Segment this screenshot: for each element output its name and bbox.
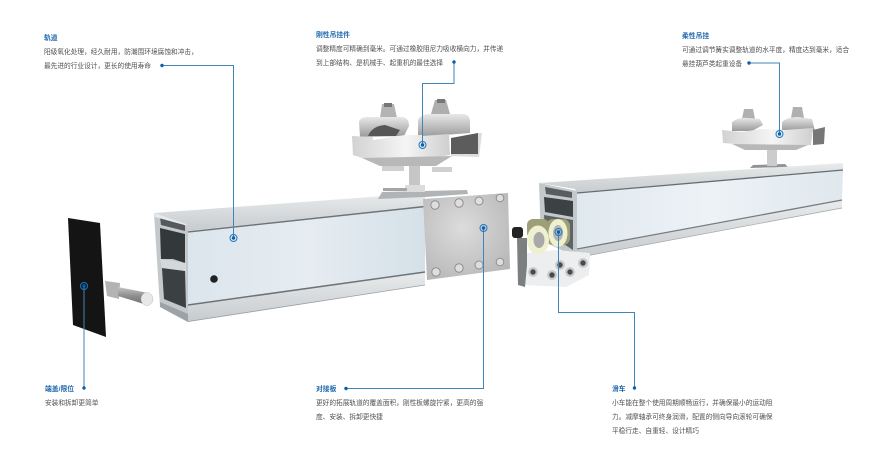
description: 更好的拓展轨道的覆盖面积，刚性板螺旋拧紧，更高的强 — [316, 398, 483, 407]
trolley small bolts — [529, 259, 587, 279]
description: 到上部结构、是机械手、起重机的最佳选择 — [316, 58, 443, 67]
description — [612, 398, 773, 435]
leader line — [555, 228, 636, 390]
limit bolt — [105, 281, 153, 306]
callout: trolley — [555, 228, 773, 435]
end cap — [68, 218, 106, 337]
flexible hanger — [722, 107, 825, 166]
description — [316, 44, 504, 67]
right rail end profile — [539, 183, 577, 258]
joint plate — [423, 193, 510, 280]
flexible plate — [722, 128, 813, 146]
right rail top strip — [539, 163, 843, 193]
rail bottom strip — [188, 272, 425, 322]
heading: 对接板 — [316, 384, 337, 393]
leader line — [344, 224, 487, 390]
side arm — [517, 238, 527, 287]
description: 最先进的行业设计，更长的使用寿命 — [44, 61, 151, 70]
description — [44, 47, 198, 70]
rail top strip — [154, 193, 425, 231]
right rail bottom strip — [575, 200, 842, 258]
rail side face — [188, 207, 425, 305]
flexible right clamp — [782, 117, 815, 131]
description: 可通过调节簧实调整轨道的水平度，精度达到毫米，适合 — [682, 45, 849, 54]
olive rollers — [527, 219, 570, 245]
description: 力。减摩轴承可终身润滑，配置的侧向导向滚轮可确保 — [612, 412, 773, 421]
flexible bolts — [742, 107, 804, 119]
stem — [767, 145, 777, 166]
bolt hole — [210, 275, 218, 283]
heading: 轨道 — [44, 33, 58, 42]
heading: 滑车 — [612, 384, 626, 393]
description: 悬挂葫芦类起重设备 — [682, 59, 742, 68]
base and stem — [378, 164, 468, 199]
flexible left clamp — [732, 118, 763, 131]
description: 度、安装、拆卸更快捷 — [316, 412, 383, 421]
heading: 柔性吊挂 — [682, 31, 709, 40]
hanger channel — [451, 133, 478, 156]
description: 平稳行走、自重轻、设计精巧 — [612, 426, 699, 435]
left clamp — [359, 117, 409, 137]
description — [682, 45, 849, 68]
trolley — [512, 219, 590, 287]
heading: 刚性吊挂件 — [316, 30, 350, 39]
front right wheel — [548, 219, 568, 247]
bolts — [380, 99, 450, 118]
plate bolts — [431, 194, 504, 276]
callout: rigid hanger — [316, 30, 504, 148]
description — [316, 398, 483, 421]
heading: 端盖/限位 — [45, 384, 74, 393]
black cap — [512, 227, 523, 238]
description: 安装和拆卸更简单 — [45, 398, 99, 407]
flexible channel — [813, 127, 825, 145]
description: 阳级氧化处理，经久耐用，防潮围环境腐蚀和冲击， — [44, 47, 198, 56]
right clamp — [418, 114, 470, 137]
callout: end cap — [45, 282, 99, 407]
callout: rail — [44, 33, 237, 242]
right rail side face — [577, 170, 843, 249]
callout: joint plate — [316, 224, 487, 421]
right rail — [539, 163, 843, 258]
left rail — [154, 193, 425, 322]
rail end profile — [154, 213, 188, 322]
hanger base on right rail — [750, 164, 788, 168]
callout: flexible hanger — [682, 31, 849, 138]
leader line — [80, 282, 88, 390]
leader line — [160, 64, 237, 241]
hanger plate — [352, 134, 450, 160]
leader line — [419, 60, 456, 148]
trolley bracket — [518, 250, 590, 287]
rigid hanger — [352, 99, 482, 199]
description: 调整精度可精确到毫米。可通过橡胶阻尼力吸收横向力，并传递 — [316, 44, 504, 53]
leader line — [747, 61, 783, 137]
front left wheel — [527, 226, 549, 254]
description: 小车能在整个使用周期顺畅运行，并确保最小的运动阻 — [612, 398, 773, 407]
